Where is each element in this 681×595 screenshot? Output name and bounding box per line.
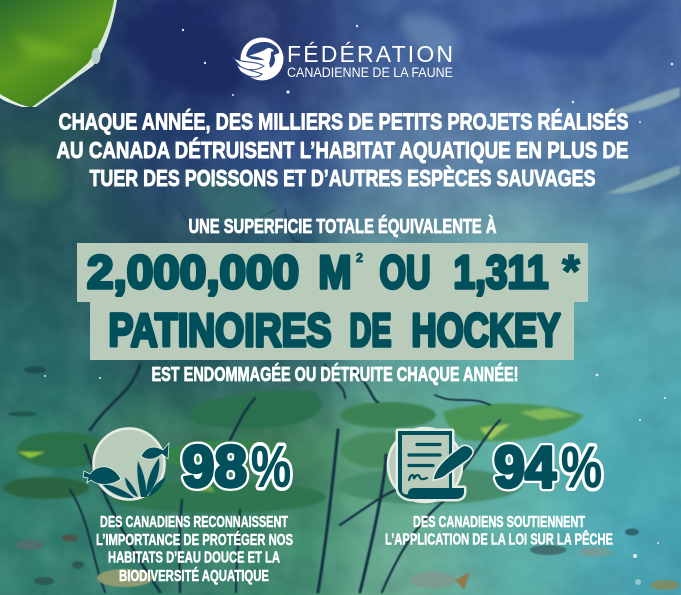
value: 94 [494,435,556,500]
leaf top left [0,0,117,107]
stat: 94% [385,428,613,548]
value: % [561,435,602,500]
value: 94 [494,435,556,500]
icon: signed document [388,428,473,502]
caption: BIODIVERSITÉ AQUATIQUE [119,568,269,585]
stat: 98% [83,428,293,585]
value: 98 [182,434,247,500]
logo emblem [232,38,284,80]
value [494,435,602,500]
logo: Fédération canadienne de la faune [232,38,453,80]
headline line 2: DE [350,304,392,356]
caption: DES CANADIENS RECONNAISSENT [100,514,288,531]
caption: HABITATS D’EAU DOUCE ET LA [108,550,280,566]
intro heading [56,107,628,191]
headline line 1: M [318,246,352,298]
value: % [251,434,291,500]
organisation name: FÉDÉRATION [287,41,453,67]
headline line 1 [87,245,580,298]
lily pads [3,390,583,513]
caption [96,514,293,585]
organisation subtitle: CANADIENNE DE LA FAUNE [287,65,453,80]
headline callout [77,243,588,360]
callout background [77,243,588,360]
follow-up text: EST ENDOMMAGÉE OU DÉTRUITE CHAQUE ANNÉE! [152,363,518,386]
headline line 1: 1,311 [454,246,548,298]
headline line 2: HOCKEY [412,304,560,356]
caption: L’IMPORTANCE DE PROTÉGER NOS [96,532,293,549]
headline line 1: OU [380,246,430,298]
caption [385,514,613,548]
value: % [561,435,602,500]
small fish in the water [8,366,680,590]
value: % [251,434,291,500]
lead-in text: UNE SUPERFICIE TOTALE ÉQUIVALENTE À [188,215,496,238]
headline line 1: 2,000,000 [87,246,299,298]
headline line 1: 2 [356,250,363,265]
icon: fish and aquatic plants [83,428,169,500]
headline line 2 [108,304,560,356]
caption: DES CANADIENS SOUTIENNENT [413,514,585,531]
headline line 2: PATINOIRES [108,304,332,356]
headline line 1: * [562,245,580,297]
value [182,434,291,500]
value: 98 [182,434,247,500]
stems [70,210,500,592]
